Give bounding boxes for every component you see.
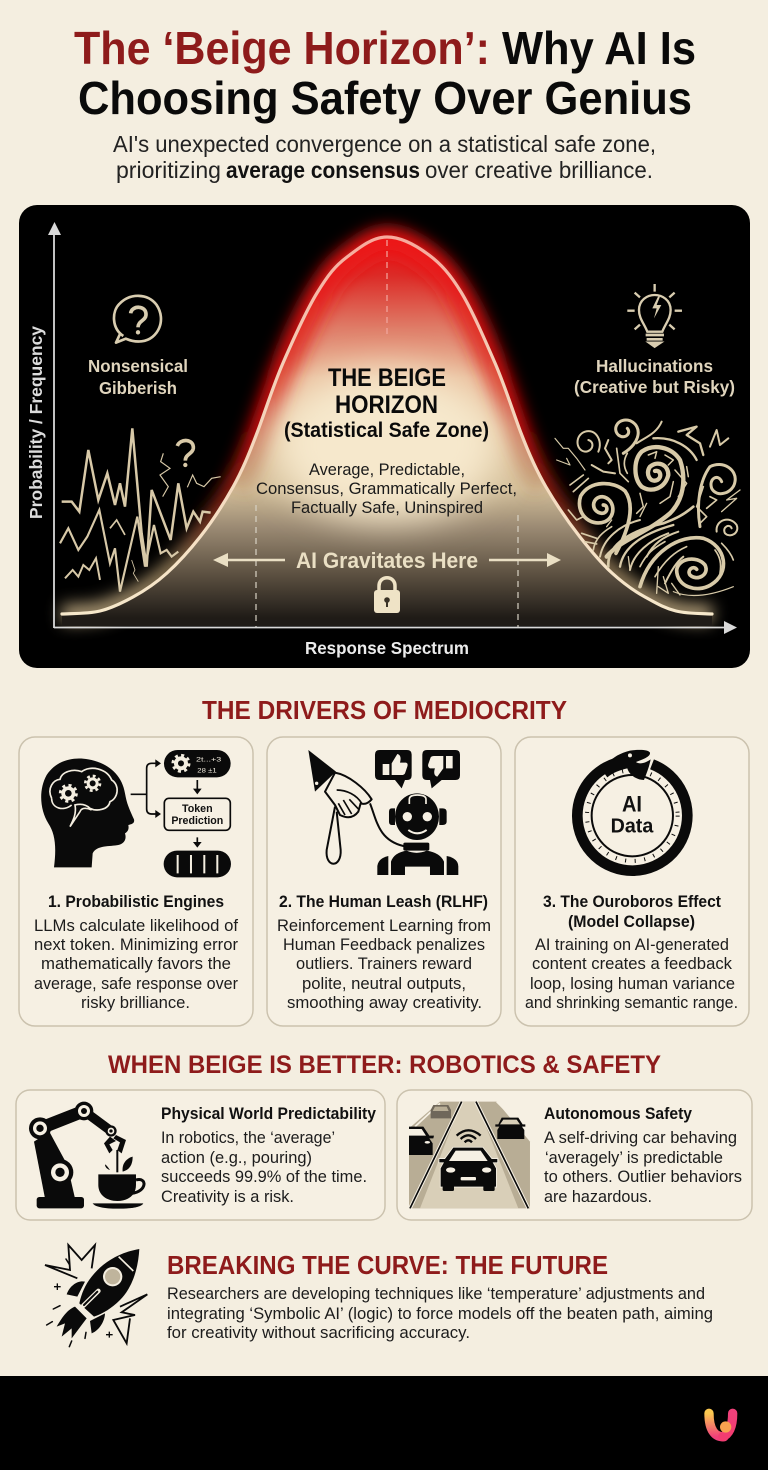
card heading: (Model Collapse) bbox=[568, 913, 695, 931]
icon: head with gears and token prediction flow: 28 ±1 bbox=[197, 768, 217, 775]
card body text: to others. Outlier behaviors bbox=[544, 1167, 742, 1186]
card body text: Reinforcement Learning from bbox=[277, 917, 491, 935]
text block: future techniques: integrating ‘Symbolic AI’ (logic) to force models off the beaten path, aiming bbox=[167, 1305, 713, 1323]
card body text bbox=[277, 917, 491, 1012]
text block: future techniques: Researchers are developing techniques like ‘temperature’ adjustments and bbox=[167, 1285, 705, 1303]
panel: probabilistic engines bbox=[19, 737, 253, 1026]
title bbox=[74, 22, 696, 124]
icon: robot arm pouring coffee bbox=[29, 1102, 144, 1209]
label: hallucinations: Hallucinations bbox=[596, 356, 713, 376]
title: The ‘Beige Horizon’: bbox=[74, 22, 490, 74]
subtitle bbox=[113, 131, 656, 183]
text block: future techniques: for creativity without sacrificing accuracy. bbox=[167, 1324, 470, 1342]
panel: autonomous safety bbox=[397, 1090, 752, 1220]
icon: light bulb bbox=[627, 284, 682, 347]
title: Why AI Is bbox=[502, 22, 696, 74]
heading: breaking the curve: BREAKING THE CURVE: THE FUTURE bbox=[167, 1250, 608, 1280]
center description: Average, Predictable, bbox=[309, 460, 465, 479]
icon: footer logo bbox=[709, 1413, 733, 1437]
label: hallucinations bbox=[574, 356, 735, 397]
panel: bell curve chart bbox=[19, 205, 750, 668]
card body text: next token. Minimizing error bbox=[34, 936, 238, 954]
card body text: action (e.g., pouring) bbox=[161, 1148, 312, 1167]
label: AI gravitates here with arrows bbox=[213, 548, 561, 573]
card body text: Human Feedback penalizes bbox=[283, 936, 485, 954]
card body text bbox=[544, 1128, 742, 1206]
center heading: the beige horizon: (Statistical Safe Zone) bbox=[284, 419, 489, 442]
center heading: the beige horizon: THE BEIGE bbox=[328, 364, 446, 392]
bell curve fill bbox=[55, 230, 720, 630]
panel: the ouroboros effect bbox=[515, 737, 749, 1026]
card body text: mathematically favors the bbox=[41, 955, 231, 973]
card heading: 2. The Human Leash (RLHF) bbox=[279, 893, 488, 911]
icon: head with gears and token prediction flow: Prediction bbox=[171, 815, 224, 827]
panel: the human leash bbox=[267, 737, 501, 1026]
icon: ouroboros snake ring bbox=[561, 745, 703, 887]
card heading: Autonomous Safety bbox=[544, 1104, 693, 1123]
title: Choosing Safety Over Genius bbox=[78, 72, 692, 124]
y axis arrow bbox=[48, 222, 61, 628]
icon: padlock bbox=[374, 578, 400, 613]
center description bbox=[256, 460, 517, 517]
panel: physical world predictability bbox=[16, 1090, 385, 1220]
icon: ouroboros snake ring: AI bbox=[622, 792, 642, 817]
subtitle: over creative brilliance. bbox=[425, 157, 653, 183]
bell curve glow bbox=[62, 237, 712, 614]
y axis label: Probability / Frequency bbox=[26, 326, 46, 519]
icon: head with gears and token prediction flow bbox=[41, 750, 231, 877]
text block: future techniques bbox=[167, 1285, 713, 1342]
icon: hand holding leash bbox=[308, 750, 414, 864]
label: hallucinations: (Creative but Risky) bbox=[574, 377, 735, 397]
card body text: In robotics, the ‘average’ bbox=[161, 1128, 335, 1147]
card body text bbox=[525, 936, 738, 1012]
card body text: LLMs calculate likelihood of bbox=[34, 917, 238, 935]
card body text bbox=[161, 1128, 367, 1206]
card body text: smoothing away creativity. bbox=[287, 994, 482, 1012]
card heading: Physical World Predictability bbox=[161, 1104, 376, 1123]
card body text bbox=[34, 917, 238, 1012]
card body text: content creates a feedback bbox=[532, 955, 733, 973]
card body text: risky brilliance. bbox=[81, 994, 190, 1012]
card body text: A self-driving car behaving bbox=[544, 1128, 737, 1147]
card body text: outliers. Trainers reward bbox=[296, 955, 472, 973]
illustration: chaotic swirls bbox=[555, 420, 740, 596]
icon: cars on highway bbox=[409, 1102, 530, 1208]
icon: ouroboros snake ring: Data bbox=[611, 816, 654, 838]
card body text: AI training on AI-generated bbox=[535, 936, 729, 954]
label: nonsensical gibberish: Gibberish bbox=[99, 378, 177, 398]
card body text: ‘averagely’ is predictable bbox=[545, 1148, 723, 1167]
subtitle: AI's unexpected convergence on a statistical safe zone, bbox=[113, 131, 656, 157]
label: nonsensical gibberish bbox=[88, 356, 188, 398]
footer bar bbox=[0, 1376, 768, 1470]
card body text: are hazardous. bbox=[544, 1187, 652, 1206]
x axis label: Response Spectrum bbox=[305, 638, 469, 658]
card heading bbox=[543, 893, 721, 931]
subtitle: average consensus bbox=[226, 157, 420, 183]
center heading: the beige horizon: HORIZON bbox=[335, 391, 438, 419]
label: nonsensical gibberish: Nonsensical bbox=[88, 356, 188, 376]
card body text: loop, losing human variance bbox=[530, 975, 735, 993]
center description: Factually Safe, Uninspired bbox=[291, 498, 483, 517]
card body text: average, safe response over bbox=[34, 975, 238, 993]
label: AI gravitates here with arrows: AI Gravitates Here bbox=[296, 548, 478, 573]
icon: rocket breaking out bbox=[45, 1245, 147, 1347]
icon: head with gears and token prediction flow: 2t...+3 bbox=[196, 756, 222, 763]
icon: head with gears and token prediction flow: Token bbox=[182, 803, 213, 815]
x axis arrow bbox=[54, 621, 737, 634]
card body text: polite, neutral outputs, bbox=[302, 975, 466, 993]
card heading: 1. Probabilistic Engines bbox=[48, 893, 224, 911]
center heading: the beige horizon bbox=[284, 364, 489, 442]
subtitle: prioritizing bbox=[116, 157, 221, 183]
card body text: and shrinking semantic range. bbox=[525, 994, 738, 1012]
heading: drivers of mediocrity: THE DRIVERS OF MEDIOCRITY bbox=[202, 695, 567, 725]
card body text: succeeds 99.9% of the time. bbox=[161, 1167, 367, 1186]
card body text: Creativity is a risk. bbox=[161, 1187, 294, 1206]
icon: question speech bubble bbox=[114, 296, 161, 343]
noise: jagged gibberish lines bbox=[60, 428, 221, 592]
card heading: 3. The Ouroboros Effect bbox=[543, 893, 721, 911]
center description: Consensus, Grammatically Perfect, bbox=[256, 479, 517, 498]
bell curve line bbox=[62, 237, 712, 614]
heading: when beige is better: WHEN BEIGE IS BETTER: ROBOTICS & SAFETY bbox=[108, 1051, 661, 1079]
icon: robot with feedback bubbles bbox=[375, 750, 460, 875]
